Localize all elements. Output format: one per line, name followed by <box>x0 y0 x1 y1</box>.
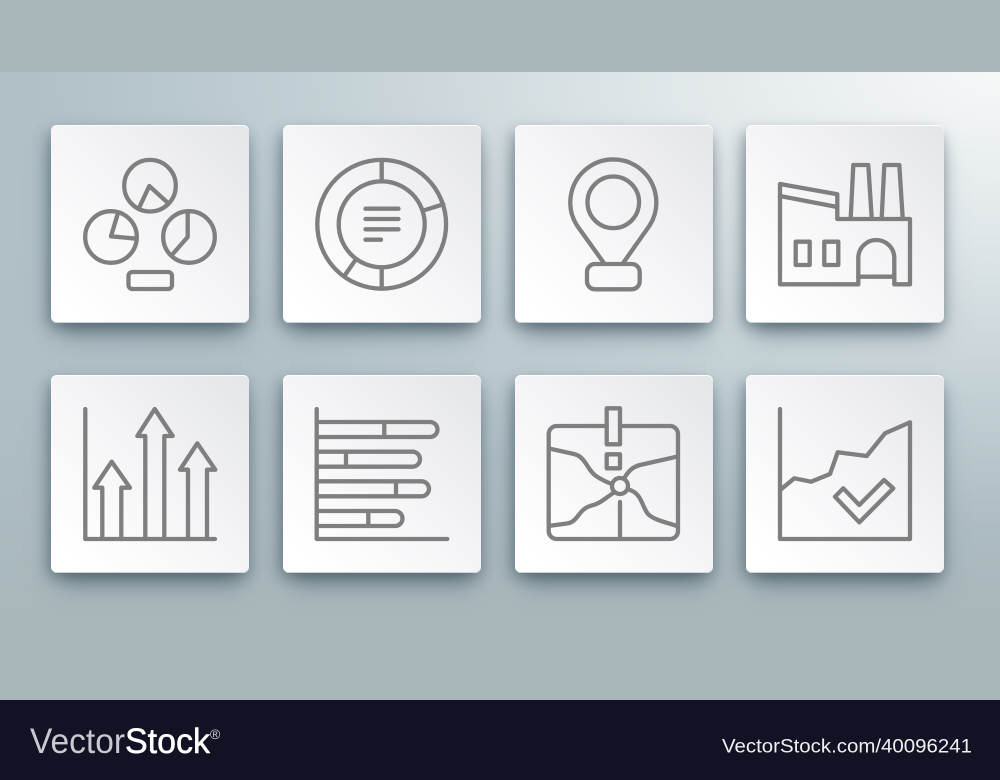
logo: VectorStock wordmark: ® <box>210 726 221 742</box>
icon: road map with warning mark <box>549 408 678 539</box>
icon: map pin <box>570 159 656 289</box>
icon: rising arrows chart <box>85 409 215 539</box>
panel: card 5 <box>51 375 249 573</box>
image id url: VectorStock.com/40096241 <box>722 737 972 758</box>
icon: horizontal bar chart <box>317 409 447 539</box>
panel: card 3 <box>514 125 712 323</box>
footer bar <box>0 700 1000 780</box>
panel: card 6 <box>283 375 481 573</box>
panel: card 1 <box>51 125 249 323</box>
logo: VectorStock wordmark <box>30 722 221 761</box>
panel: card 7 <box>514 375 712 573</box>
icon: donut chart with text lines <box>317 160 446 289</box>
icon: factory <box>780 165 910 284</box>
panel: card 2 <box>283 125 481 323</box>
icon: area chart with check mark <box>780 409 910 539</box>
icon: three pie charts with label <box>85 160 215 289</box>
panel: card 4 <box>746 125 944 323</box>
logo: VectorStock wordmark: Stock <box>125 722 210 761</box>
panel: card 8 <box>746 375 944 573</box>
logo: VectorStock wordmark: Vector <box>30 722 125 761</box>
